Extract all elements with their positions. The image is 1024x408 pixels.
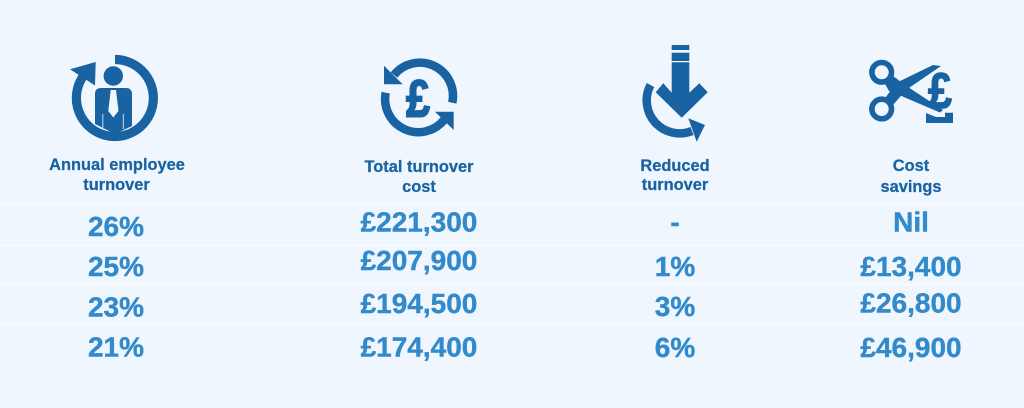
heading: cost savings: Cost	[893, 157, 930, 175]
heading: annual employee turnover: Annual employee	[49, 156, 185, 174]
column: total turnover cost values	[361, 207, 477, 363]
icon: scissors cutting pound: £	[928, 63, 952, 119]
column: reduced turnover values: 6%	[655, 332, 695, 363]
heading: reduced turnover	[640, 157, 710, 194]
heading: reduced turnover: turnover	[642, 176, 709, 194]
column: cost savings values: £46,900	[860, 332, 962, 363]
column: cost savings values: £26,800	[860, 288, 962, 319]
column: annual employee turnover values: 25%	[88, 251, 144, 282]
column: total turnover cost values: £194,500	[361, 288, 477, 319]
icon: scissors cutting pound	[872, 63, 953, 123]
column: reduced turnover values	[655, 207, 695, 363]
column: total turnover cost values: £207,900	[361, 245, 477, 276]
heading: cost savings	[880, 157, 942, 196]
heading: annual employee turnover	[49, 156, 185, 194]
icon: employee turnover	[70, 60, 153, 136]
column: reduced turnover values: -	[670, 207, 680, 238]
column: reduced turnover values: 1%	[655, 251, 695, 282]
column: total turnover cost values: £174,400	[361, 332, 477, 363]
column: cost savings values: Nil	[893, 207, 929, 238]
heading: total turnover cost: cost	[402, 178, 436, 196]
column: reduced turnover values: 3%	[655, 291, 695, 322]
column: cost savings values	[860, 207, 962, 363]
column: annual employee turnover values: 23%	[88, 292, 144, 322]
heading: cost savings: savings	[880, 178, 942, 196]
heading: total turnover cost	[365, 158, 474, 196]
icon: pound cycle	[384, 63, 454, 132]
icon: reduced turnover arrow	[647, 45, 708, 142]
heading: annual employee turnover: turnover	[83, 176, 150, 194]
heading: reduced turnover: Reduced	[640, 157, 710, 175]
column: annual employee turnover values	[88, 211, 144, 363]
column: annual employee turnover values: 21%	[88, 332, 144, 363]
column: annual employee turnover values: 26%	[88, 211, 144, 242]
icon: pound cycle: £	[406, 71, 430, 129]
column: cost savings values: £13,400	[860, 251, 962, 282]
column: total turnover cost values: £221,300	[361, 207, 477, 238]
heading: total turnover cost: Total turnover	[365, 158, 474, 176]
